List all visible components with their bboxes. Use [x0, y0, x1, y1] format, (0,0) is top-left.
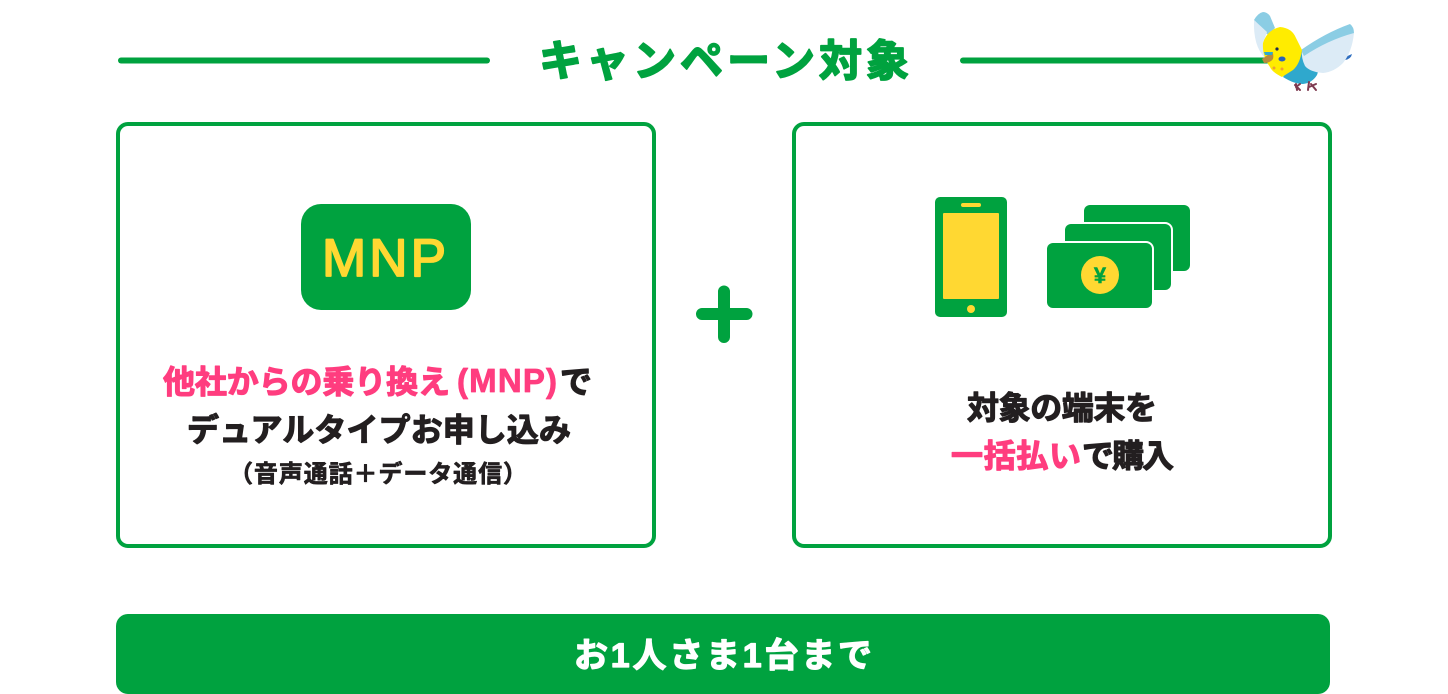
text: voice and data note: （音声通話＋データ通信） [229, 460, 527, 488]
panel: lump-sum device purchase [794, 124, 1330, 546]
text: lump-sum payment, pink part: 一括払い [951, 438, 1081, 474]
icon: stack of yen banknotes: ¥ [1094, 263, 1107, 288]
text: MNP abbreviation in parentheses: (MNP) [457, 362, 557, 399]
icon: stack of yen banknotes [1047, 205, 1190, 308]
icon: smartphone [935, 197, 1007, 317]
banner text: お1人さま1台まで [574, 637, 872, 675]
icon: flying budgerigar [1254, 12, 1354, 90]
panel: MNP application [118, 124, 654, 546]
heading rule: right [960, 58, 1272, 64]
text: MNP condition, pink part: 他社からの乗り換え [163, 364, 450, 400]
banner: limit per person [116, 614, 1330, 694]
icon: MNP badge [301, 204, 471, 310]
text: target device: 対象の端末を [967, 390, 1157, 426]
icon: MNP badge: MNP [322, 229, 446, 288]
text: purchase: で購入 [1082, 438, 1174, 474]
title: キャンペーン対象 [539, 38, 909, 86]
text: dual type application: デュアルタイプお申し込み [187, 412, 571, 448]
heading rule: left [118, 58, 490, 64]
text: MNP condition, end of line: で [560, 364, 592, 400]
icon: plus [702, 292, 746, 337]
